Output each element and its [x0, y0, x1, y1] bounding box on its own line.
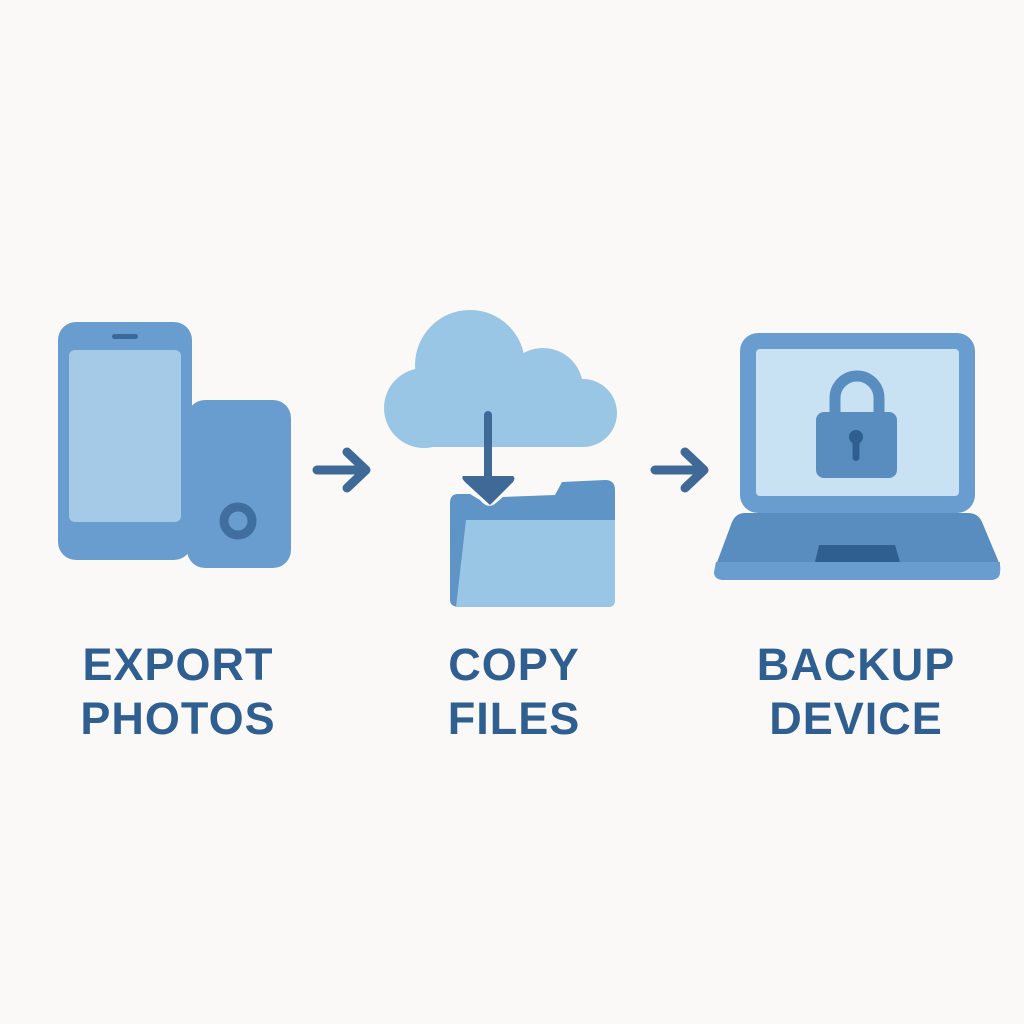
arrow: cloud to folder — [462, 411, 514, 505]
icon: cloud — [384, 310, 617, 448]
label: copy files: FILES — [448, 693, 580, 744]
label: export photos — [80, 639, 276, 744]
arrow 1 — [317, 452, 366, 488]
icon: folder — [450, 480, 615, 607]
label: export photos: PHOTOS — [80, 693, 276, 744]
label: export photos: EXPORT — [82, 639, 274, 690]
label: backup device: BACKUP — [757, 639, 955, 690]
label: copy files: COPY — [448, 639, 580, 690]
label: backup device — [757, 639, 955, 744]
label: backup device: DEVICE — [769, 693, 943, 744]
icon: laptop with lock — [714, 333, 1000, 580]
label: copy files — [448, 639, 580, 744]
icon: phones — [58, 322, 291, 568]
arrow 2 — [655, 452, 704, 488]
